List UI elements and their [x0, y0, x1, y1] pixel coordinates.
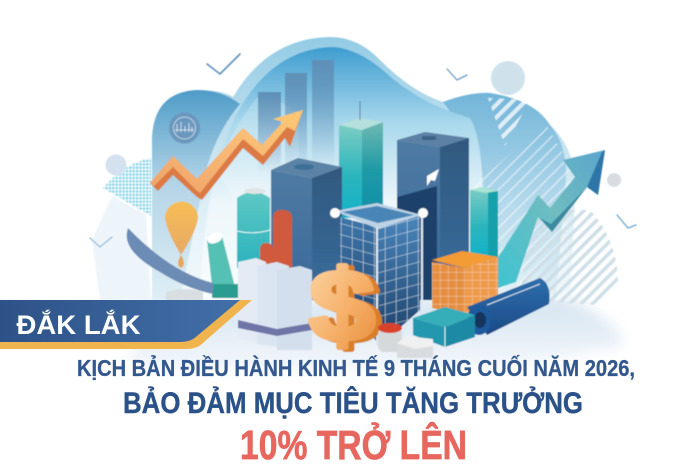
background bar chart: [258, 60, 334, 172]
region badge: [0, 300, 252, 349]
ground shadow: [130, 296, 625, 372]
teal cone: [206, 230, 238, 298]
title line two: BẢO ĐẢM MỤC TIÊU TĂNG TRƯỞNG: [123, 386, 583, 420]
pale sweep: [218, 92, 300, 210]
purple band: [238, 320, 312, 336]
bar one: [258, 92, 281, 172]
curved band: [127, 228, 213, 294]
badge blue body: [0, 300, 240, 342]
check upper right: [447, 69, 467, 80]
circle left: [106, 154, 126, 176]
small white box: [397, 336, 433, 358]
dotted diamond: [103, 158, 151, 216]
arrow shadow side: [150, 110, 303, 200]
left lobe: [152, 90, 240, 300]
white column blocks: [238, 258, 312, 350]
left pale panel: [92, 196, 151, 300]
illustration: [90, 37, 636, 372]
decorative background shapes: [92, 37, 618, 305]
metal cylinder: [166, 289, 203, 301]
main background blob: [152, 37, 576, 300]
block three: [277, 266, 312, 350]
dollar sign: $: [309, 250, 375, 362]
check top: [207, 54, 240, 74]
block one: [238, 258, 266, 344]
badge gold edge: [0, 300, 252, 349]
orange rising arrow: [150, 110, 303, 200]
red cylinders: [260, 210, 292, 268]
orange grid cube: [432, 251, 498, 315]
title line one: KỊCH BẢN ĐIỀU HÀNH KINH TẾ 9 THÁNG CUỐI NĂM 2026,: [77, 353, 635, 381]
teal tower rear: [339, 101, 383, 218]
short red cylinder: [260, 243, 273, 268]
arrow top face: [150, 110, 303, 193]
circle right: [607, 173, 621, 187]
badge label: ĐẮK LẮK: [16, 310, 140, 340]
lightbulb balloon: [165, 202, 198, 268]
check mark accents: [90, 54, 636, 247]
lower right stripes: [520, 210, 618, 305]
blue cylinder: [467, 278, 550, 335]
glass building: [330, 203, 428, 345]
blob white stripes: [470, 122, 572, 290]
teal right rising arrow: [495, 150, 605, 288]
dollar sign: $: [315, 252, 381, 364]
teal small bar: [470, 187, 498, 258]
check left: [90, 237, 112, 247]
small white cylinder: [378, 323, 402, 352]
check far right: [617, 215, 636, 228]
circle top right: [491, 61, 525, 95]
right blue zone: [443, 93, 566, 295]
title line three: 10% TRỞ LÊN: [240, 422, 467, 468]
decorative circles: [106, 61, 621, 187]
icon: round chart badge: [169, 112, 200, 144]
bar two: [285, 73, 307, 170]
bar three: [312, 60, 334, 165]
dark blue tower left: [271, 158, 342, 300]
teal box: [413, 307, 475, 347]
upper right stripes: [488, 98, 530, 146]
tall red cylinder: [273, 210, 292, 268]
title: [77, 353, 635, 468]
teal cylinder: [237, 188, 270, 268]
dark blue tower right: [397, 132, 469, 300]
block two: [257, 262, 289, 348]
central hump: [200, 47, 483, 300]
